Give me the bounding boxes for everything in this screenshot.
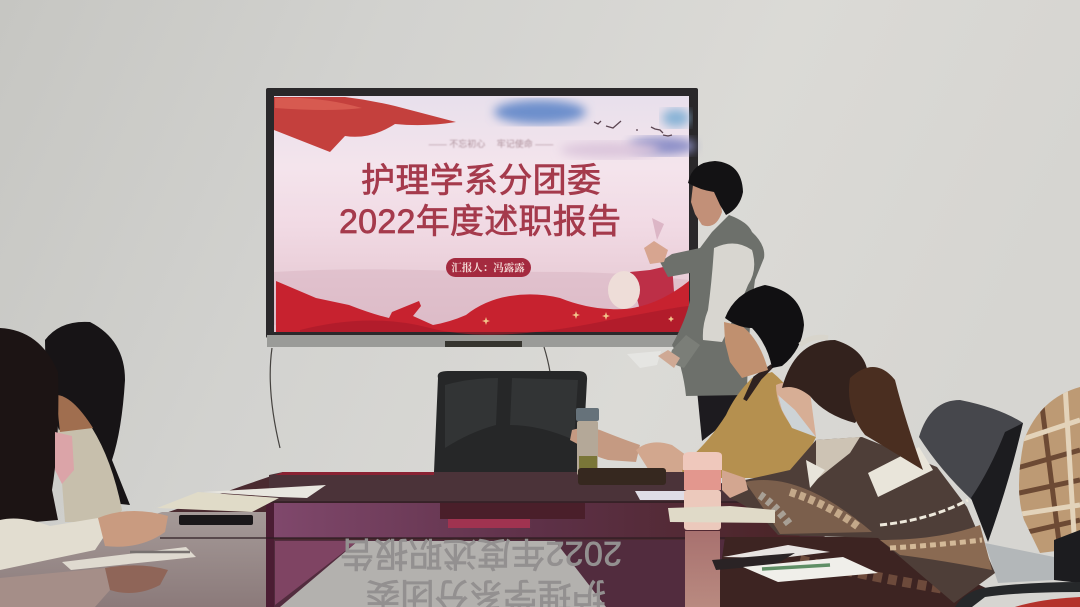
lower sleeve [668, 335, 700, 368]
reporter badge: 汇报人：冯露露 [451, 261, 525, 274]
monitor [266, 88, 698, 347]
back chair [434, 371, 587, 472]
red object at bottom right [1015, 597, 1080, 607]
left woman's reflection [0, 568, 110, 607]
jacket [660, 215, 764, 396]
seated woman [722, 337, 995, 603]
seams [160, 502, 800, 538]
birds [594, 121, 672, 136]
bag on floor [985, 543, 1054, 583]
left woman back [45, 322, 130, 522]
man's head [724, 322, 768, 378]
presenter [627, 161, 764, 441]
foreground chair arm [955, 582, 1080, 607]
sky clouds [494, 100, 696, 158]
right chair [919, 400, 1023, 542]
drum [608, 265, 675, 310]
chair reflection [440, 503, 585, 519]
black bag strip [1054, 530, 1080, 583]
ponytail [849, 367, 923, 470]
cable [270, 347, 550, 448]
pink thermos [683, 452, 722, 530]
woman's hand [722, 470, 748, 498]
sleeve pattern [745, 480, 872, 534]
head [691, 185, 722, 226]
sweater [728, 437, 995, 603]
reporter badge [446, 258, 531, 277]
man's hands [570, 428, 690, 474]
slide subtitle: 2022年度述职报告 [339, 203, 621, 241]
reflected slide [280, 541, 606, 607]
top band [269, 472, 745, 502]
white knit collar [868, 447, 933, 497]
mauve side reflection [0, 512, 268, 607]
lower hand with paper [627, 350, 680, 368]
table [0, 472, 990, 607]
right table items [668, 506, 878, 582]
left woman front [0, 328, 168, 570]
front panel [272, 540, 960, 607]
shirt collar [816, 437, 860, 480]
left table papers [62, 485, 326, 570]
slogan: —— 不忘初心 牢记使命 —— [429, 138, 553, 149]
mirrored slide text: 2022年度述职报告 [340, 534, 622, 572]
slide [274, 96, 696, 335]
purple triangle [275, 541, 358, 605]
hair [782, 340, 868, 423]
red wave bottom [276, 281, 689, 332]
hair clip [800, 337, 828, 345]
edge strip [266, 503, 274, 607]
right person plaid [1019, 387, 1080, 553]
man's arm and jacket [570, 285, 816, 478]
legs [697, 390, 743, 441]
mid band [272, 503, 800, 538]
inner white shirt [703, 243, 754, 342]
stars on wave [482, 311, 674, 325]
red ribbon top [274, 97, 456, 152]
mountains [274, 269, 689, 325]
wallet and notebook [578, 468, 685, 500]
sweater and thermos reflections [715, 537, 990, 607]
slide title: 护理学系分团委 [361, 162, 601, 200]
glass bottle [576, 408, 599, 475]
face and mask [776, 383, 816, 437]
hand with paper [644, 218, 668, 264]
